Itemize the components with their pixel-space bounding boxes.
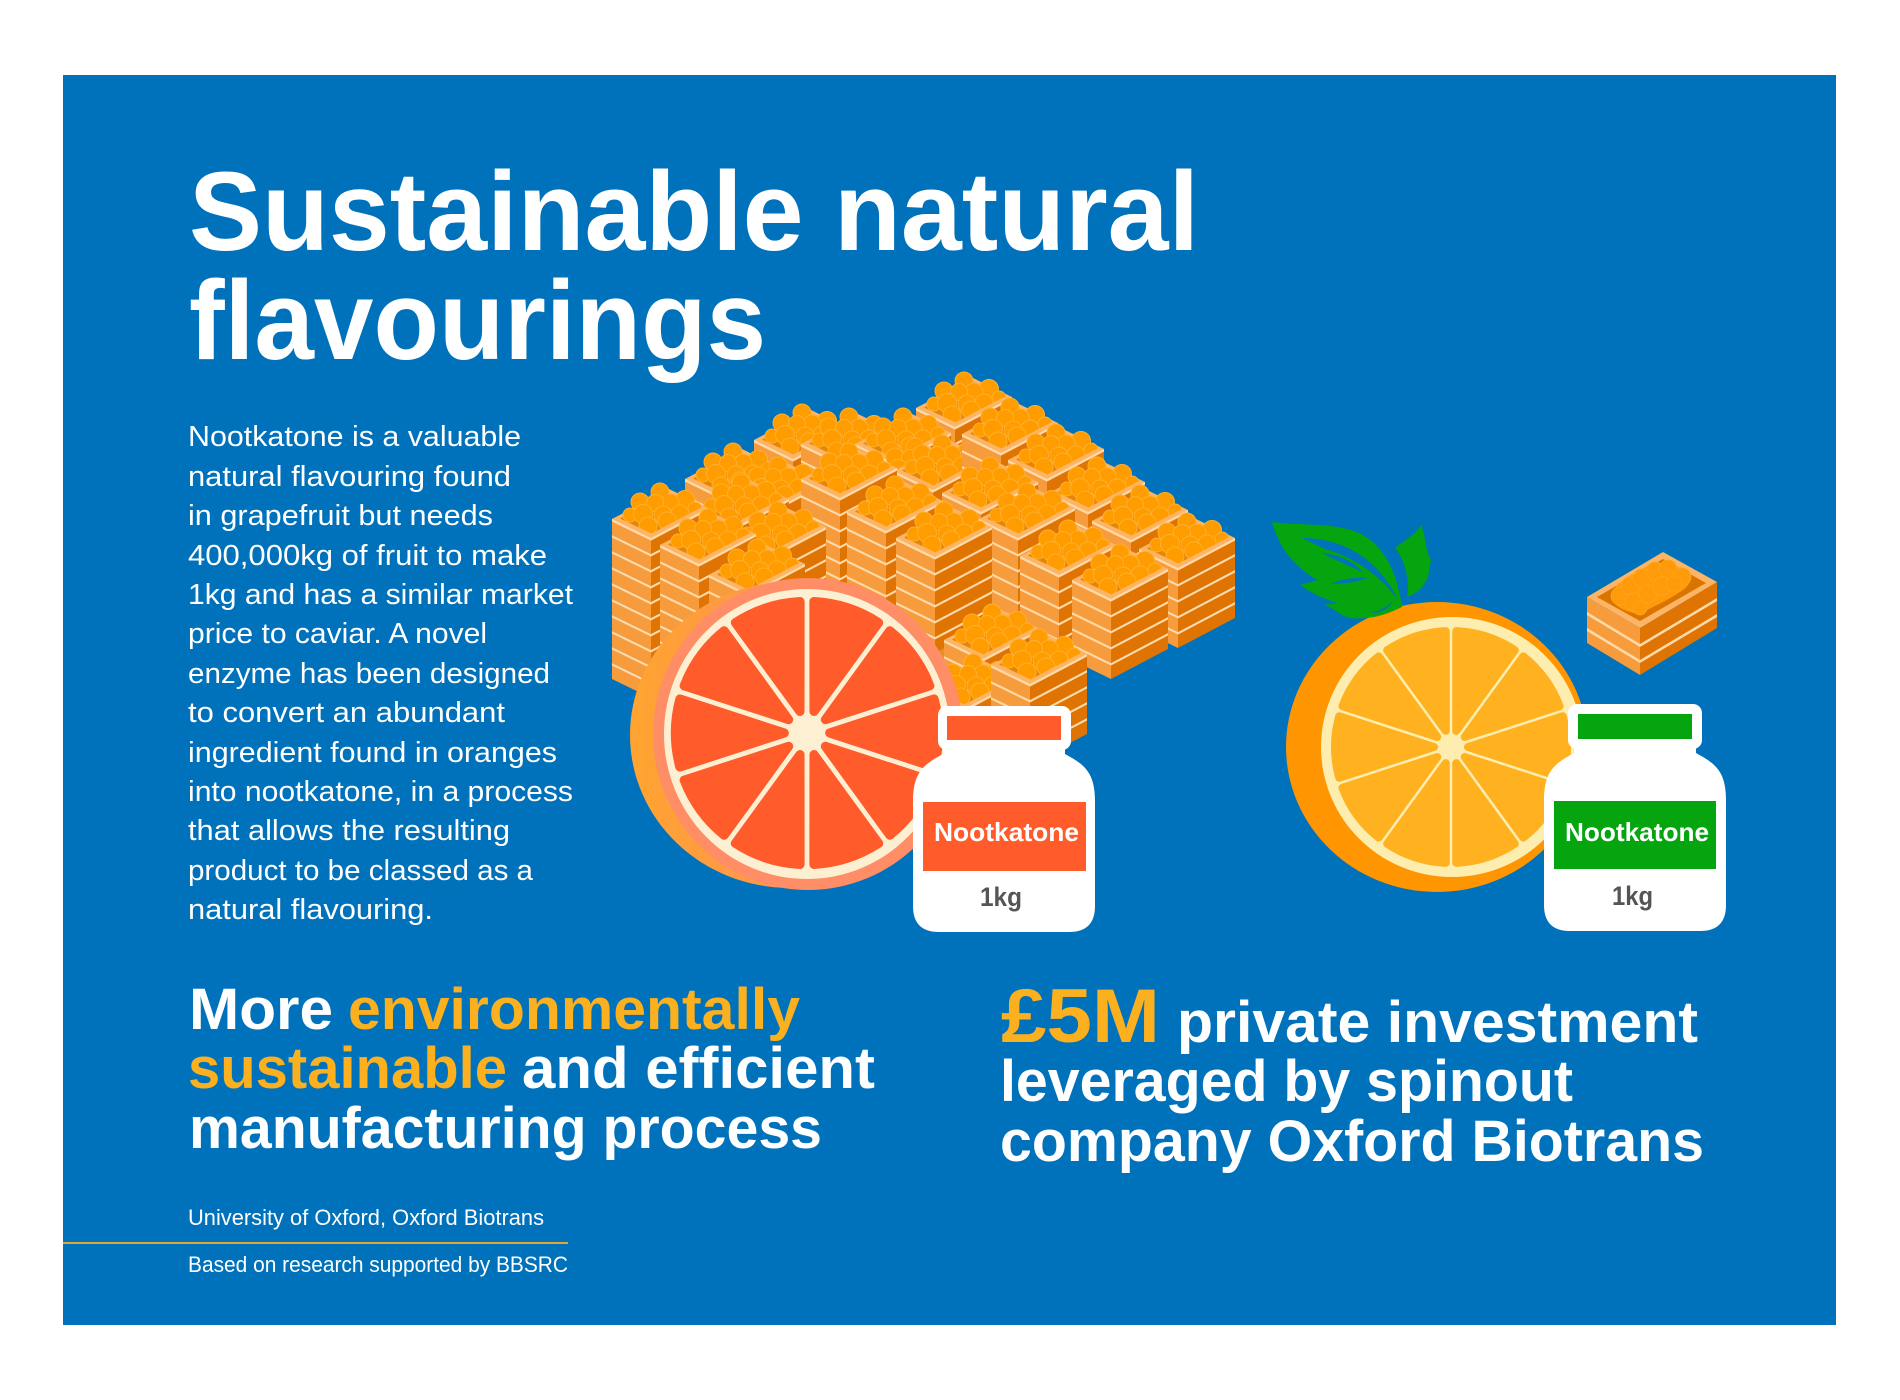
footer credits: Based on research supported by BBSRC — [188, 1252, 568, 1277]
icon: green leaves — [1272, 522, 1431, 618]
icon: orange nootkatone jar: Nootkatone — [1565, 817, 1709, 847]
title: Sustainable natural — [189, 149, 1199, 274]
crate pile: 400,000kg of grapefruit — [612, 372, 1235, 764]
text block: nootkatone description: 1kg and has a similar market — [188, 579, 573, 611]
callout: environmentally sustainable: manufacturing process — [189, 1096, 822, 1161]
text block: nootkatone description: Nootkatone is a valuable — [188, 421, 521, 453]
callout: private investment: company Oxford Biotrans — [1000, 1109, 1704, 1174]
icon: orange nootkatone jar — [1544, 704, 1726, 931]
footer credits — [63, 1205, 568, 1277]
icon: small crate stack — [1587, 552, 1717, 675]
text block: nootkatone description: 400,000kg of fruit to make — [188, 540, 547, 572]
callout: environmentally sustainable: sustainable — [188, 1036, 507, 1101]
text block: nootkatone description: natural flavouring found — [188, 461, 511, 493]
callout: private investment — [1000, 974, 1704, 1174]
text block: nootkatone description: in grapefruit but needs — [188, 500, 493, 532]
text block: nootkatone description: enzyme has been designed — [188, 658, 550, 690]
text block: nootkatone description: that allows the resulting — [188, 815, 510, 847]
text block: nootkatone description: price to caviar. A novel — [188, 618, 487, 650]
callout: environmentally sustainable: More — [189, 977, 333, 1042]
text block: nootkatone description: ingredient found in oranges — [188, 737, 557, 769]
icon: grapefruit nootkatone jar — [913, 706, 1095, 932]
text block: nootkatone description: to convert an abundant — [188, 697, 505, 729]
title: flavourings — [189, 258, 766, 383]
icon: orange nootkatone jar: 1kg — [1612, 881, 1653, 911]
icon: grapefruit nootkatone jar: 1kg — [980, 882, 1022, 912]
callout: environmentally sustainable — [188, 977, 875, 1161]
icon: grapefruit half — [630, 578, 963, 890]
callout: private investment: £5M — [1001, 974, 1160, 1059]
text block: nootkatone description: product to be classed as a — [188, 855, 534, 887]
callout: private investment: private investment — [1177, 990, 1698, 1055]
text block: nootkatone description: natural flavouring. — [188, 894, 433, 926]
text block: nootkatone description — [188, 421, 573, 926]
text block: nootkatone description: into nootkatone, in a process — [188, 776, 573, 808]
icon: orange half — [1286, 602, 1588, 892]
footer credits: University of Oxford, Oxford Biotrans — [188, 1205, 544, 1230]
callout: private investment: leveraged by spinout — [1000, 1049, 1573, 1114]
title — [189, 149, 1199, 383]
callout: environmentally sustainable: environmentally — [348, 977, 800, 1042]
icon: grapefruit nootkatone jar: Nootkatone — [934, 817, 1079, 847]
callout: environmentally sustainable: and efficient — [522, 1036, 875, 1101]
